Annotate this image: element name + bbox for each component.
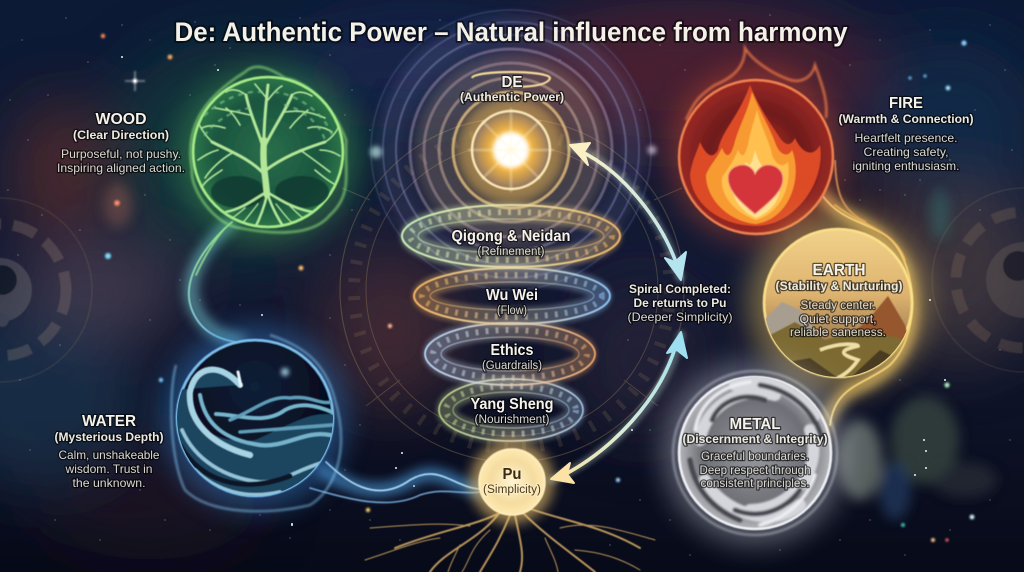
label: De: (Authentic Power) xyxy=(460,90,564,104)
label: Water: (Mysterious Depth) xyxy=(54,430,164,444)
label: Earth: (Stability & Nurturing) xyxy=(776,279,902,293)
label: Wood: WOOD xyxy=(96,111,146,128)
label: Fire: FIRE xyxy=(889,95,923,112)
label: Earth: EARTH xyxy=(812,262,866,279)
metal orb xyxy=(663,361,847,545)
halo xyxy=(472,72,550,87)
cycle arrow: De to Pu xyxy=(570,143,686,280)
right bagua wheel xyxy=(932,188,1024,372)
label: Metal: Graceful boundaries. xyxy=(701,449,809,463)
label: Earth: Steady center. xyxy=(800,298,876,312)
icon: heart xyxy=(728,165,783,214)
icon: metal swirl xyxy=(690,381,822,525)
callout: spiral completed: (Deeper Simplicity) xyxy=(628,310,732,324)
label: Ethics: Ethics xyxy=(490,342,534,359)
label: Wood xyxy=(57,111,185,175)
label: Pu xyxy=(483,466,541,496)
label: Metal: (Discernment & Integrity) xyxy=(682,432,828,446)
sun glow xyxy=(456,95,566,205)
label: Metal: Deep respect through xyxy=(700,463,810,477)
label: Metal xyxy=(682,416,828,490)
label: Metal: consistent principles. xyxy=(700,476,810,490)
fire orb xyxy=(668,48,866,243)
label: Water: wisdom. Trust in xyxy=(64,462,152,476)
label: Earth xyxy=(776,262,902,339)
earth orb xyxy=(748,213,928,393)
label: Ethics: (Guardrails) xyxy=(482,360,542,372)
callout: spiral completed xyxy=(628,282,732,324)
label: Pu: (Simplicity) xyxy=(483,484,541,496)
left bagua wheel xyxy=(0,198,92,382)
ribbon: Ethics xyxy=(425,323,595,385)
icon: landscape xyxy=(766,296,907,377)
ribbon: Wu Wei xyxy=(414,268,610,324)
label: Wood: Inspiring aligned action. xyxy=(57,161,185,175)
callout: spiral completed: Spiral Completed: xyxy=(629,282,731,296)
ribbon: Yang Sheng xyxy=(439,379,583,441)
label: Earth: Quiet support, xyxy=(800,312,876,326)
DE orb xyxy=(370,10,660,290)
central zodiac wheel xyxy=(340,118,684,462)
label: Wu Wei: (Flow) xyxy=(497,305,527,317)
icon: tree of life xyxy=(196,84,340,228)
label: De xyxy=(460,74,564,104)
label: Water: WATER xyxy=(82,413,136,430)
label: Yang Sheng: Yang Sheng xyxy=(470,396,554,413)
Pu orb xyxy=(470,440,554,524)
label: Qigong and Neidan: (Refinement) xyxy=(478,246,545,258)
label: Qigong and Neidan xyxy=(452,228,570,258)
spiral ribbons xyxy=(402,205,620,441)
label: Fire: (Warmth & Connection) xyxy=(838,112,974,126)
label: Fire: igniting enthusiasm. xyxy=(852,159,960,173)
label: Metal: METAL xyxy=(730,416,781,433)
tendrils between elements xyxy=(189,195,912,503)
label: Earth: reliable saneness. xyxy=(790,325,886,339)
label: Water: the unknown. xyxy=(72,476,146,490)
label: Qigong and Neidan: Qigong & Neidan xyxy=(452,228,570,245)
label: Yang Sheng xyxy=(470,396,554,426)
label: Wood: (Clear Direction) xyxy=(73,128,169,142)
label: Wu Wei xyxy=(486,287,538,317)
ribbon: Qigong and Neidan xyxy=(402,205,620,267)
label: Pu: Pu xyxy=(502,466,522,483)
DE concentric rings xyxy=(371,10,651,290)
label: Water: Calm, unshakeable xyxy=(58,448,160,462)
label: Wu Wei: Wu Wei xyxy=(486,287,538,304)
icon: waves xyxy=(175,368,335,510)
wood orb xyxy=(176,67,360,243)
icon: flames xyxy=(690,85,821,226)
water orb xyxy=(163,326,347,511)
label: Ethics xyxy=(482,342,542,372)
label: Fire: Creating safety, xyxy=(864,145,948,159)
title: De: Authentic Power – Natural influence from harmony xyxy=(174,17,848,47)
callout: spiral completed: De returns to Pu xyxy=(634,296,726,310)
label: Fire: Heartfelt presence. xyxy=(854,131,958,145)
label: Water xyxy=(54,413,164,490)
cycle arrow: Pu to De xyxy=(551,332,687,483)
label: Yang Sheng: (Nourishment) xyxy=(474,414,550,426)
label: De: DE xyxy=(502,74,523,91)
label: Wood: Purposeful, not pushy. xyxy=(61,147,181,161)
Pu roots xyxy=(365,508,655,572)
label: Fire xyxy=(838,95,974,173)
